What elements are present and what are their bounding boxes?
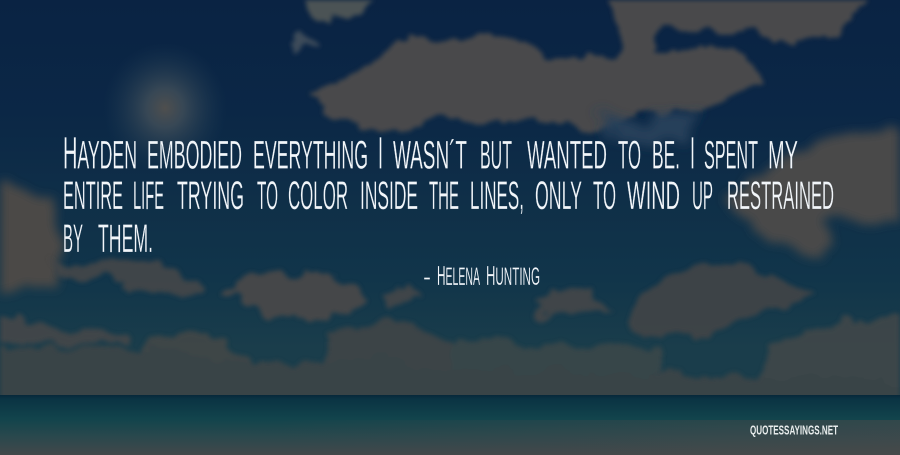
line 1: I (690, 128, 695, 178)
line 2: TO (593, 174, 616, 218)
line 1: MY (768, 134, 798, 178)
line 2: UP (692, 174, 713, 218)
line 2: WIND (627, 174, 680, 218)
line 3 (63, 217, 153, 261)
line 2: TRYING (177, 174, 244, 218)
clouds: upper (293, 0, 875, 130)
attribution: HELENA (437, 260, 480, 291)
line 1: BE. (652, 134, 680, 178)
line 2: ONLY (535, 174, 582, 218)
sea and beach (0, 395, 900, 455)
line 2: COLOR (288, 174, 348, 218)
line 1: TO (618, 134, 641, 178)
quote text (63, 128, 834, 261)
line 2 (63, 174, 834, 218)
attribution: - (423, 263, 431, 291)
line 2: LIFE (133, 174, 164, 218)
line 1: I (378, 128, 383, 178)
watermark: QUOTESSAYINGS.NET (750, 422, 838, 438)
clouds: right and left of the quote (0, 115, 900, 295)
line 2: THE (429, 174, 459, 218)
line 1: WANTED (527, 134, 607, 178)
line 1: EVERYTHING (253, 134, 368, 178)
line 1 (63, 128, 798, 178)
sun glow (103, 43, 227, 173)
line 1: HAYDEN (63, 128, 137, 178)
line 2: ENTIRE (63, 174, 123, 218)
line 1: BUT (480, 134, 512, 178)
line 2: LINES, (470, 174, 524, 218)
line 2: TO (257, 174, 278, 218)
clouds: lower (0, 260, 900, 410)
quote text: THEM. (98, 217, 153, 261)
line 1: EMBODIED (147, 134, 242, 178)
line 3: BY (63, 217, 83, 261)
attribution: HUNTING (486, 260, 540, 291)
line 1: WASN´T (393, 134, 467, 178)
line 2: INSIDE (360, 174, 418, 218)
line 1: SPENT (704, 134, 758, 178)
